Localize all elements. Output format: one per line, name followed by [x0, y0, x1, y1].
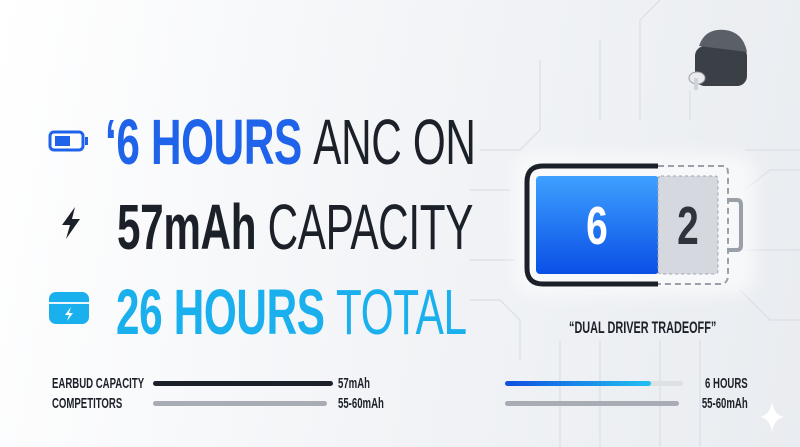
comparison bars left: 55-60mAh: [338, 395, 384, 412]
battery chart: [514, 159, 757, 294]
comparison bars left: COMPETITORS: [52, 395, 122, 412]
icon: charging case: [49, 292, 89, 324]
comparison bars left: EARBUD CAPACITY: [52, 375, 144, 392]
icon: sparkle: [761, 403, 784, 431]
row 3: 26 hours total: 26 HOURS TOTAL: [116, 276, 467, 348]
comparison bars right: 55-60mAh: [702, 395, 748, 412]
comparison bars right: 6 HOURS: [705, 375, 748, 392]
icon: earbuds case: [688, 30, 747, 90]
comparison bars left: [52, 375, 384, 412]
comparison bars left: 57mAh: [338, 375, 370, 392]
row 1: 6 hours ANC on: ‘6 HOURS ANC ON: [105, 106, 476, 178]
row 2: 57mAh capacity: 57mAh CAPACITY: [117, 191, 473, 263]
icon: battery: [48, 130, 88, 152]
comparison bars right: [505, 375, 748, 412]
caption: “DUAL DRIVER TRADEOFF”: [569, 318, 716, 337]
battery chart: 6: [586, 195, 608, 255]
icon: lightning: [62, 207, 80, 239]
battery chart: 2: [677, 195, 699, 255]
